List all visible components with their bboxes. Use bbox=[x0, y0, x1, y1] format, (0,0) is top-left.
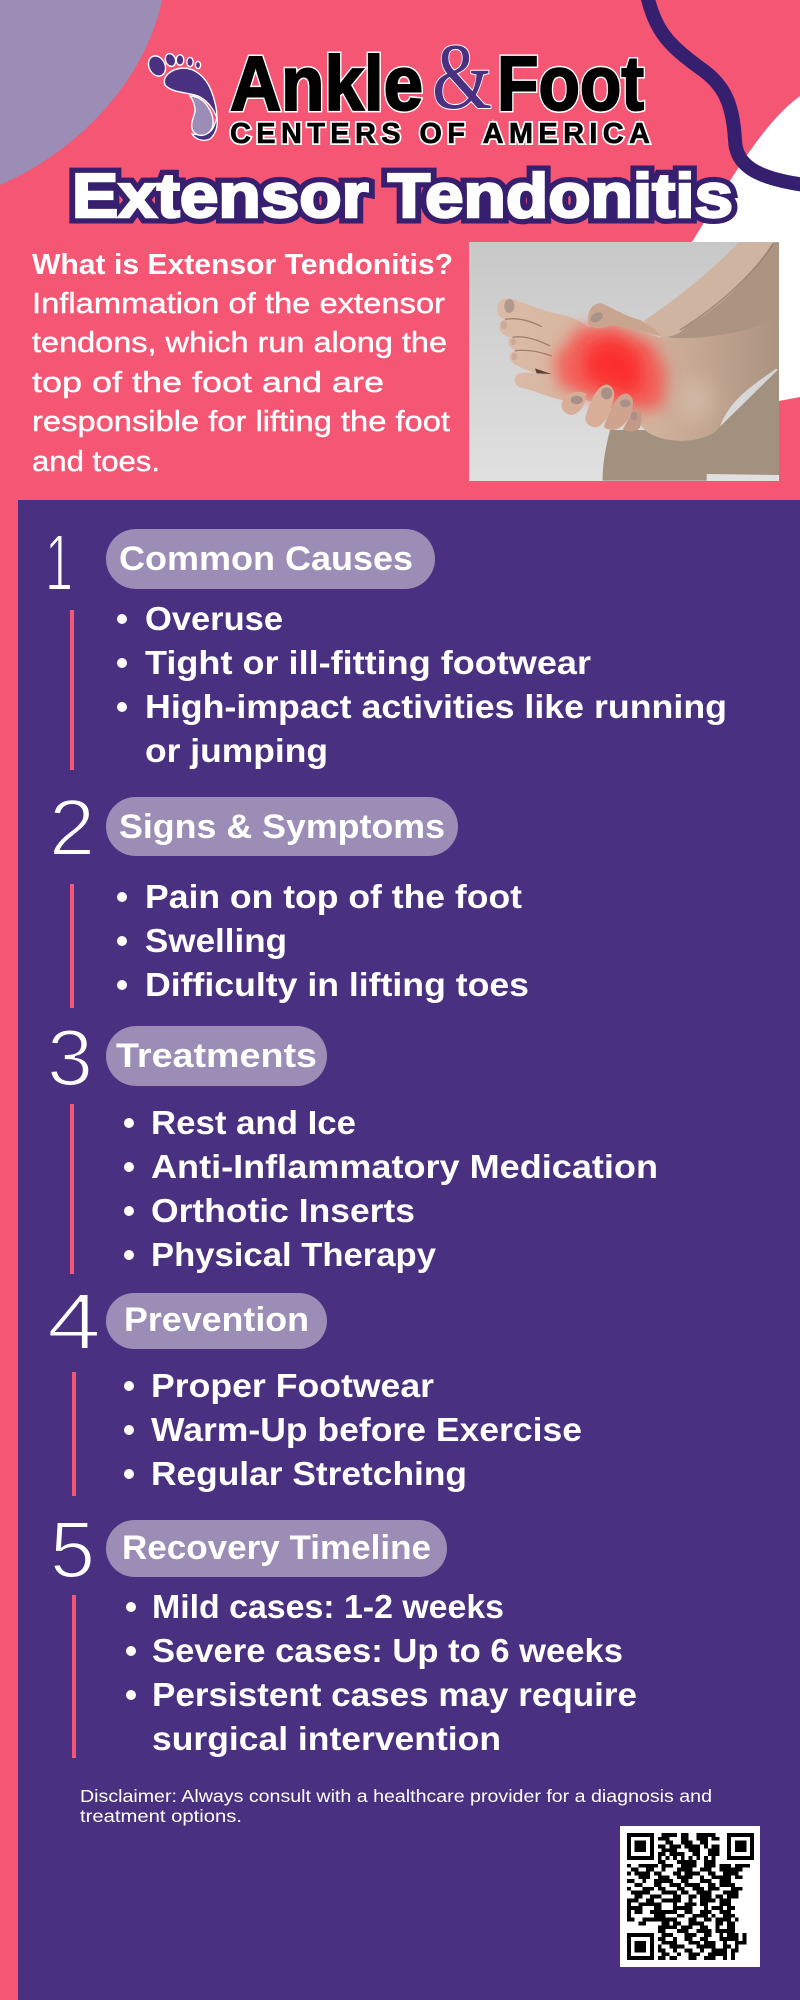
bullet list: treatments: Physical Therapy bbox=[151, 1236, 437, 1273]
logo wordmark: Foot: Foot bbox=[497, 41, 644, 127]
bullet list: symptoms: Pain on top of the foot bbox=[145, 878, 522, 915]
pill heading: signs and symptoms: Signs & Symptoms bbox=[119, 808, 445, 846]
bullet list: recovery: surgical intervention bbox=[152, 1720, 501, 1757]
section 3: treatments bbox=[47, 1013, 658, 1274]
intro text block bbox=[32, 249, 453, 478]
intro text block: and toes. bbox=[32, 446, 160, 478]
connector line bbox=[70, 884, 74, 1008]
bullet list: symptoms: Difficulty in lifting toes bbox=[145, 966, 529, 1003]
intro text block: top of the foot and are bbox=[32, 367, 384, 399]
white corner blob bbox=[690, 96, 800, 420]
logo wordmark: Foot: Foot bbox=[497, 41, 644, 127]
bullet list: causes: Tight or ill-fitting footwear bbox=[145, 644, 591, 681]
bullet list: prevention: Regular Stretching bbox=[151, 1455, 467, 1492]
pill heading: treatments: Treatments bbox=[116, 1037, 317, 1075]
pill heading: prevention: Prevention bbox=[124, 1301, 309, 1339]
logo wordmark: Ankle: Ankle bbox=[230, 41, 423, 127]
bullet list: causes bbox=[117, 600, 727, 769]
connector line bbox=[70, 1104, 74, 1274]
bullet list: causes: or jumping bbox=[145, 732, 328, 769]
pill heading: treatments bbox=[106, 1026, 327, 1086]
main purple panel bbox=[18, 500, 800, 2000]
intro text block: Inflammation of the extensor bbox=[32, 288, 446, 320]
pill heading: recovery timeline: Recovery Timeline bbox=[122, 1529, 431, 1567]
connector line bbox=[72, 1595, 76, 1758]
lavender corner blob bbox=[0, 0, 162, 185]
number 4: 4 bbox=[47, 1277, 101, 1366]
pill heading: common causes: Common Causes bbox=[119, 540, 413, 578]
pill heading: common causes bbox=[106, 529, 435, 589]
section 4: prevention bbox=[47, 1277, 582, 1496]
connector line bbox=[70, 610, 74, 770]
pill heading: signs and symptoms bbox=[106, 797, 458, 856]
disclaimer: treatment options. bbox=[80, 1806, 242, 1826]
number 2: 2 bbox=[49, 783, 95, 872]
bullet list: treatments: Rest and Ice bbox=[151, 1104, 356, 1141]
disclaimer: Disclaimer: Always consult with a healthcare provider for a diagnosis and bbox=[80, 1786, 712, 1806]
section 5: recovery timeline bbox=[50, 1505, 637, 1758]
bullet list: treatments: Anti-Inflammatory Medication bbox=[151, 1148, 658, 1185]
bullet list: treatments bbox=[124, 1104, 658, 1273]
bullet list: symptoms bbox=[117, 878, 529, 1003]
bullet list: recovery bbox=[126, 1588, 637, 1757]
bullet list: causes: Overuse bbox=[145, 600, 283, 637]
bullet list: recovery: Persistent cases may require bbox=[152, 1676, 637, 1713]
section 1: common causes bbox=[45, 518, 727, 770]
number 5: 5 bbox=[50, 1505, 95, 1594]
disclaimer bbox=[80, 1786, 712, 1826]
intro heading: What is Extensor Tendonitis? bbox=[32, 249, 453, 281]
pill heading: prevention bbox=[106, 1293, 327, 1349]
dark curved line bbox=[647, 0, 800, 185]
intro text block: tendons, which run along the bbox=[32, 327, 447, 359]
logo tagline: CENTERS OF AMERICA bbox=[230, 118, 650, 150]
section 2: signs and symptoms bbox=[49, 783, 529, 1008]
QR code bbox=[620, 1826, 760, 1967]
number 1: 1 bbox=[45, 518, 73, 607]
intro text block: responsible for lifting the foot bbox=[32, 406, 450, 438]
photo: foot with red inflammation bbox=[469, 242, 779, 481]
bullet list: treatments: Orthotic Inserts bbox=[151, 1192, 415, 1229]
number 3: 3 bbox=[47, 1013, 93, 1102]
bullet list: prevention bbox=[124, 1367, 582, 1492]
logo wordmark: Ankle: Ankle bbox=[230, 41, 423, 127]
bullet list: symptoms: Swelling bbox=[145, 922, 287, 959]
logo bbox=[145, 25, 650, 150]
icon: foot bbox=[145, 52, 217, 140]
logo wordmark: ampersand: & bbox=[432, 25, 492, 129]
connector line bbox=[72, 1372, 76, 1496]
title: Extensor Tendonitis bbox=[72, 162, 733, 231]
bullet list: prevention: Warm-Up before Exercise bbox=[151, 1411, 582, 1448]
pill heading: recovery timeline bbox=[106, 1520, 447, 1577]
title: Extensor Tendonitis bbox=[72, 162, 733, 231]
bullet list: recovery: Mild cases: 1-2 weeks bbox=[152, 1588, 504, 1625]
bullet list: prevention: Proper Footwear bbox=[151, 1367, 434, 1404]
bullet list: causes: High-impact activities like running bbox=[145, 688, 727, 725]
logo tagline: CENTERS OF AMERICA bbox=[230, 118, 650, 150]
bullet list: recovery: Severe cases: Up to 6 weeks bbox=[152, 1632, 623, 1669]
